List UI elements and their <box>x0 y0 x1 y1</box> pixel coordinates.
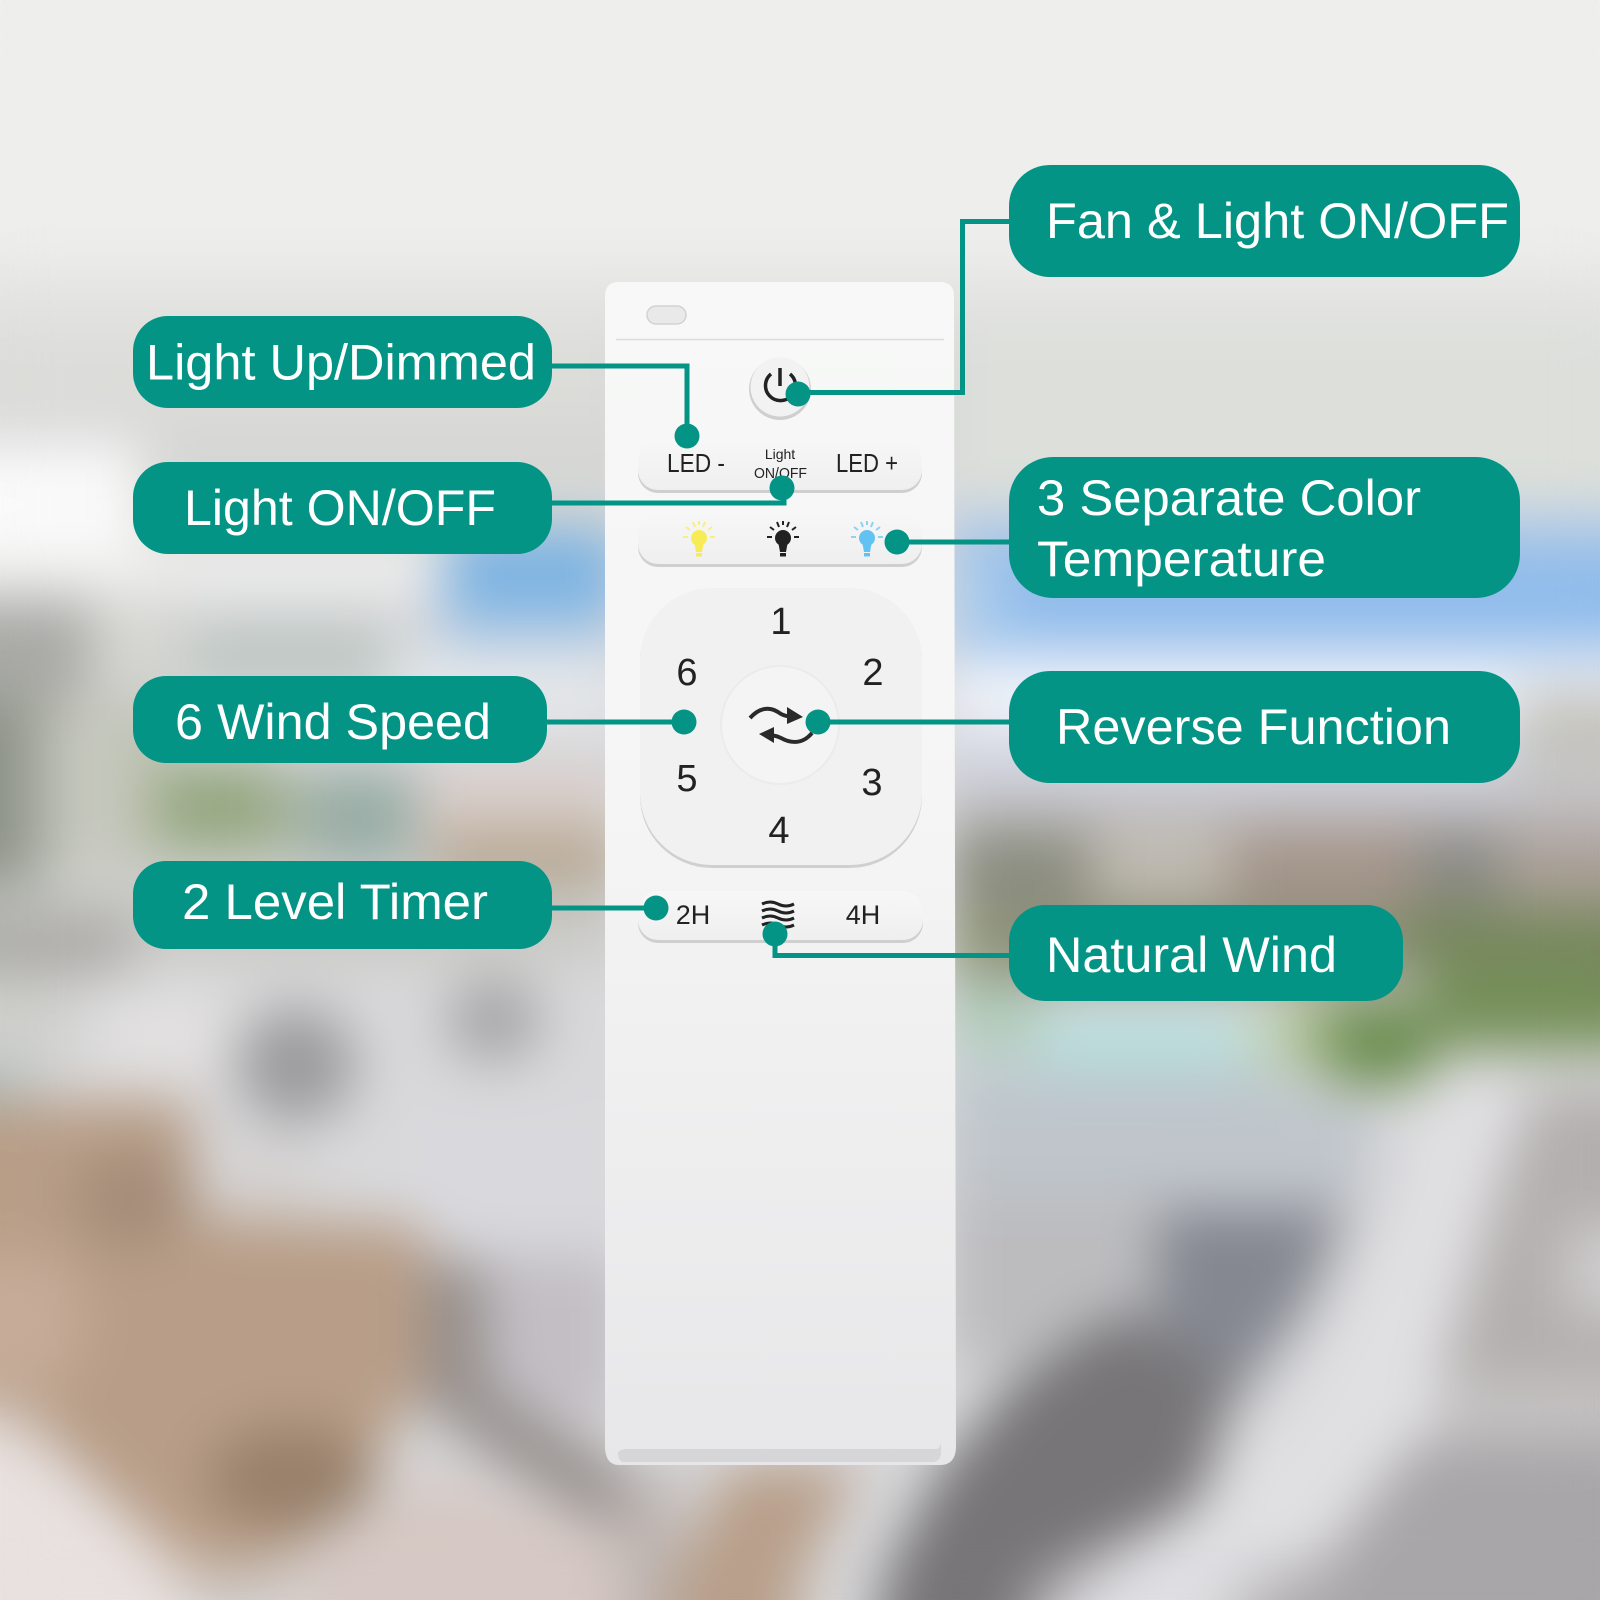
LED button bar: Light <box>765 446 795 462</box>
callout: Light Up/Dimmed <box>133 316 700 448</box>
remote control body <box>605 282 956 1465</box>
callout: Light Up/Dimmed: Light Up/Dimmed <box>146 334 536 390</box>
callout: Fan & Light ON/OFF: Fan & Light ON/OFF <box>1046 193 1509 249</box>
power button <box>749 358 811 420</box>
LED button bar: ON/OFF <box>754 466 807 482</box>
timer button bar: 2H <box>676 900 710 930</box>
icon: blue bulb <box>851 521 883 556</box>
speed dial: 1 <box>770 601 792 643</box>
callout: 6 Wind Speed: 6 Wind Speed <box>175 694 491 750</box>
icon: reverse arrows <box>750 707 812 743</box>
callout: Natural Wind <box>762 905 1403 1001</box>
color temperature button bar <box>638 513 922 567</box>
timer button bar <box>638 891 923 943</box>
callout: Fan & Light ON/OFF <box>786 165 1520 406</box>
callout: Reverse Function <box>806 671 1520 783</box>
callout: 3 Separate Color Temperature: 3 Separate Color <box>1037 470 1421 526</box>
LED button bar: LED + <box>836 448 898 478</box>
speed dial: 3 <box>861 762 883 804</box>
icon: natural wind waves <box>762 902 794 927</box>
LED button bar: LED - <box>667 448 725 478</box>
icon: yellow bulb <box>683 521 715 556</box>
callout: 2 Level Timer: 2 Level Timer <box>182 874 488 930</box>
speed dial <box>640 588 922 868</box>
callout: Natural Wind: Natural Wind <box>1046 927 1337 983</box>
callout: 3 Separate Color Temperature: Temperature <box>1037 531 1326 587</box>
callout: 2 Level Timer <box>133 861 668 949</box>
callout: 3 Separate Color Temperature <box>884 457 1520 598</box>
speed dial: 6 <box>676 652 698 694</box>
timer button bar: 4H <box>846 900 880 930</box>
indicator light <box>647 306 686 324</box>
speed dial: 4 <box>768 810 790 852</box>
icon: black bulb <box>767 521 799 556</box>
callout: Light ON/OFF <box>133 462 794 554</box>
LED button bar <box>638 440 922 493</box>
callout: Reverse Function: Reverse Function <box>1056 699 1451 755</box>
callout: 6 Wind Speed <box>133 676 696 763</box>
speed dial: 2 <box>862 652 884 694</box>
callout: Light ON/OFF: Light ON/OFF <box>184 480 496 536</box>
speed dial: 5 <box>676 758 698 800</box>
